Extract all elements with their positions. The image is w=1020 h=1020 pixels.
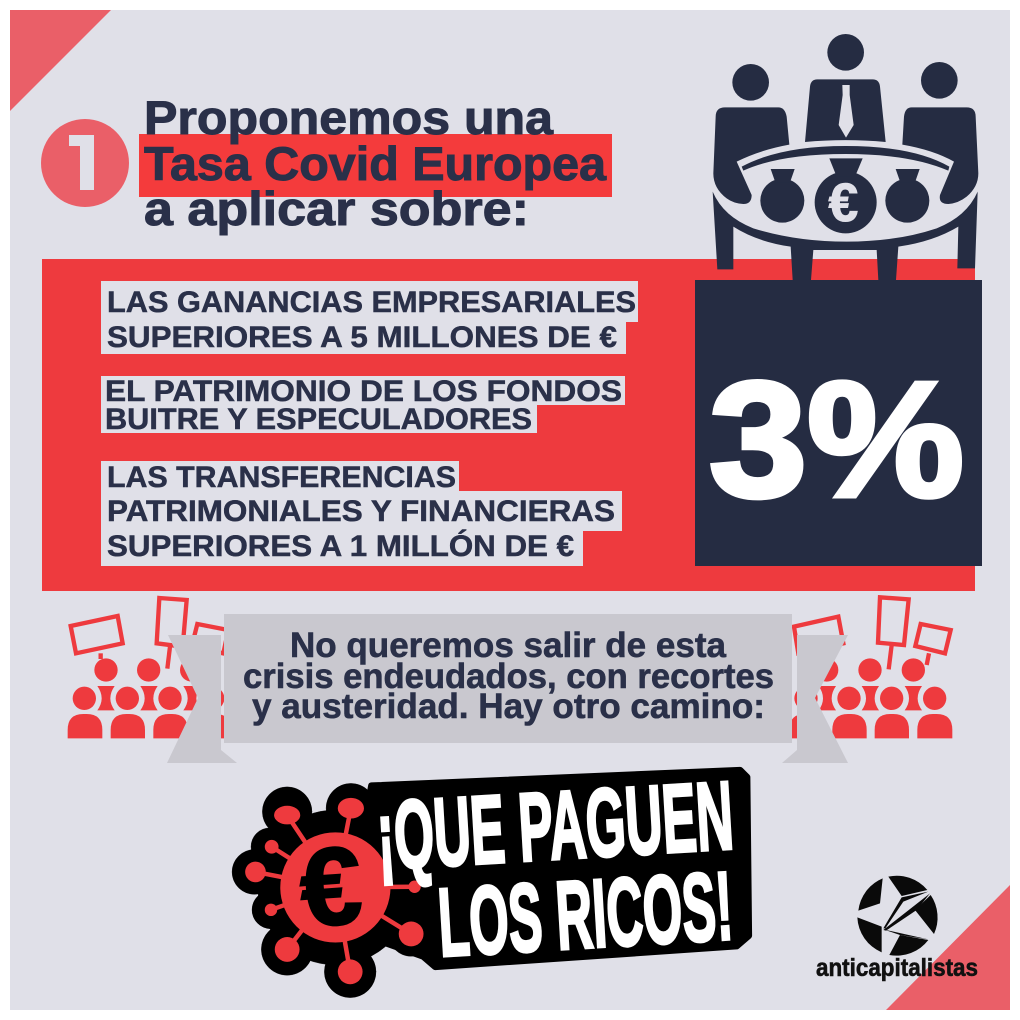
panel: 3 percent	[695, 280, 982, 566]
number badge: 1	[62, 119, 106, 207]
text block: transfers: LAS TRANSFERENCIAS	[107, 461, 456, 494]
banner text: y austeridad. Hay otro camino:	[252, 687, 765, 726]
corner triangle top left	[10, 10, 111, 111]
banner	[167, 614, 848, 763]
text block: transfers: PATRIMONIALES Y FINANCIERAS	[107, 495, 615, 528]
slogan: LOS RICOS!	[435, 851, 736, 977]
text block: vulture funds	[101, 375, 625, 436]
text block: transfers	[101, 461, 622, 566]
corner triangle bottom right	[886, 885, 1010, 1010]
logo mark	[857, 876, 938, 956]
icon: executives around money table: €	[828, 174, 858, 233]
banner text	[243, 626, 774, 726]
panel: 3 percent: 3%	[709, 348, 964, 531]
title: Tasa Covid Europea	[144, 137, 607, 190]
icon: executives around money table	[713, 34, 978, 280]
slogan	[374, 761, 736, 977]
panel: tax bases	[42, 259, 975, 591]
title: Proponemos una	[144, 91, 554, 144]
ribbon tail left	[167, 635, 237, 763]
banner text: No queremos salir de esta	[290, 626, 727, 665]
sticker black backing	[232, 770, 749, 998]
sticker: que paguen los ricos	[232, 761, 749, 998]
icon: protest crowd left	[68, 598, 231, 738]
text block: vulture funds: BUITRE Y ESPECULADORES	[105, 403, 532, 436]
logo: anticapitalistas	[816, 876, 978, 982]
icon: protest crowd right	[789, 597, 952, 738]
text block: transfers: SUPERIORES A 1 MILLÓN DE €	[107, 529, 574, 563]
text block: vulture funds: EL PATRIMONIO DE LOS FONDOS	[105, 375, 622, 408]
icon: euro virus: €	[296, 824, 366, 951]
text block: business profits	[101, 281, 638, 354]
banner text: crisis endeudados, con recortes	[243, 657, 774, 696]
text block: business profits: LAS GANANCIAS EMPRESARIALES	[107, 286, 636, 319]
title	[139, 91, 612, 235]
logo wordmark: anticapitalistas	[816, 954, 978, 982]
number badge	[41, 119, 129, 207]
title: a aplicar sobre:	[144, 182, 529, 235]
icon: euro virus	[245, 798, 424, 984]
ribbon tail right	[782, 635, 848, 763]
text block: business profits: SUPERIORES A 5 MILLONES DE €	[107, 321, 617, 354]
